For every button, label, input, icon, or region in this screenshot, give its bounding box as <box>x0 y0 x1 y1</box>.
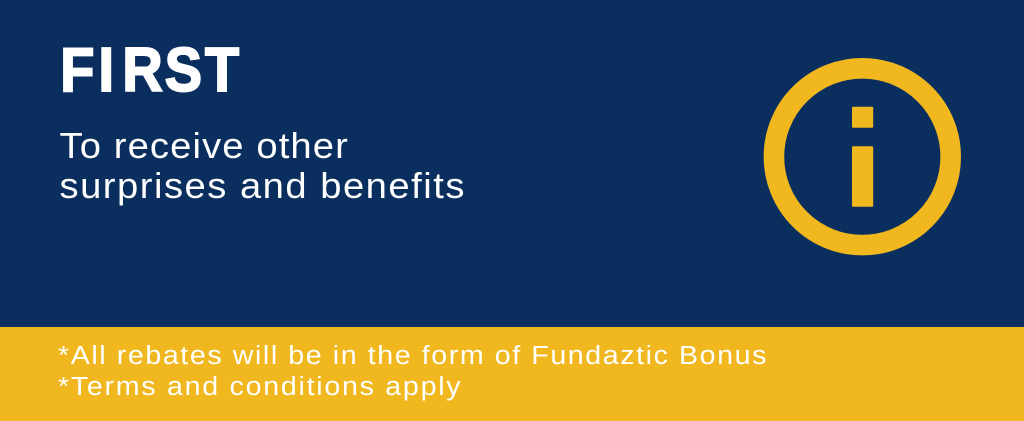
text block: footer notes: *Terms and conditions apply <box>58 371 461 401</box>
text block: footer notes <box>58 340 766 401</box>
heading: FIRST: FIRST <box>60 36 239 105</box>
icon: information circle <box>774 68 951 245</box>
text block: benefits message: To receive other <box>60 125 348 166</box>
text block: footer notes: *All rebates will be in the form of Fundaztic Bonus <box>58 340 766 370</box>
panel: navy background <box>0 0 1024 327</box>
text block: benefits message <box>60 125 464 206</box>
text block: benefits message: surprises and benefits <box>60 165 464 206</box>
panel: yellow footer band <box>0 327 1024 421</box>
